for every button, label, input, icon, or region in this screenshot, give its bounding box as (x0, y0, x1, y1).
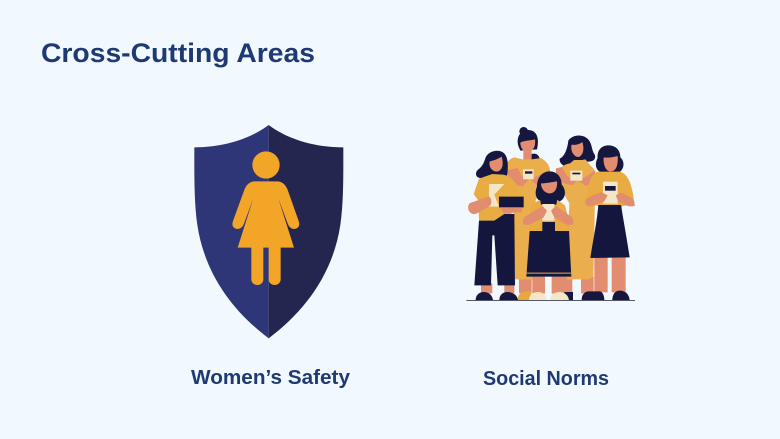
icon: women's safety shield (194, 125, 343, 338)
label: women's safety: Women’s Safety (191, 367, 351, 389)
shield left half (194, 125, 269, 338)
ground line (466, 300, 635, 301)
illustration: group of women (466, 127, 635, 301)
title: Cross-Cutting Areas (41, 38, 315, 68)
woman far left (468, 151, 524, 300)
woman figure (232, 151, 299, 285)
label: social norms: Social Norms (483, 368, 609, 390)
woman front centre (523, 171, 574, 300)
shield right half (269, 125, 343, 338)
woman back right (556, 135, 595, 300)
woman far right (582, 145, 635, 300)
woman back left (506, 127, 550, 300)
